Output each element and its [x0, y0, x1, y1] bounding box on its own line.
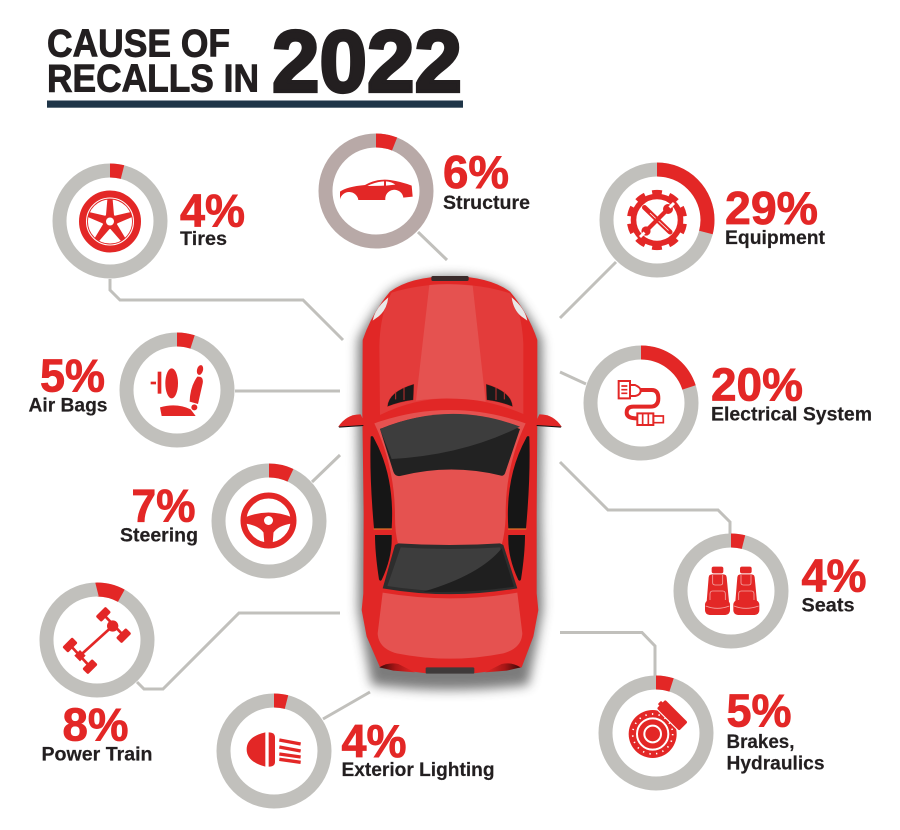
icon: seat with air bag — [151, 364, 204, 416]
rear bumper — [426, 667, 474, 674]
right hood vent — [486, 384, 513, 407]
rear window — [383, 543, 517, 594]
label — [726, 731, 825, 774]
left hood vent — [387, 384, 414, 407]
right mirror — [536, 414, 562, 428]
heading: year 2022: 2022 — [272, 14, 462, 110]
car shadow — [357, 276, 543, 690]
callout: exterior lighting — [224, 700, 494, 802]
value: 4% — [802, 550, 866, 602]
right side windows — [508, 436, 530, 581]
connector: air bags — [235, 390, 340, 392]
right tail light — [485, 663, 521, 672]
icon: headlight — [247, 732, 301, 767]
donut: 4% — [60, 170, 160, 272]
donut: 29% — [606, 170, 708, 270]
value: 7% — [132, 480, 196, 532]
connector: exterior lighting — [323, 692, 370, 719]
label: Structure — [443, 192, 530, 214]
donut: 6% — [326, 140, 426, 242]
label: Brakes, — [726, 731, 794, 753]
callout: steering — [120, 470, 320, 572]
icon: front seats — [705, 567, 759, 615]
callout: air bags — [28, 340, 228, 440]
title underline — [47, 100, 463, 108]
callout: seats — [680, 540, 866, 642]
connector: electrical system — [560, 372, 586, 384]
label: Hydraulics — [726, 752, 825, 774]
icon: car side view — [340, 180, 413, 200]
left mirror — [338, 414, 364, 428]
label: Power Train — [42, 744, 152, 766]
value: 29% — [725, 182, 818, 234]
label: Steering — [120, 524, 198, 546]
label: Seats — [802, 594, 855, 616]
callout: power train — [42, 590, 152, 766]
donut: 4% — [224, 700, 324, 802]
value: 4% — [342, 715, 406, 767]
icon: steering wheel — [244, 496, 294, 546]
roof — [374, 410, 526, 545]
heading: cause of recalls in: CAUSE OF — [47, 22, 230, 66]
donut: 7% — [218, 470, 320, 572]
donut: 5% — [126, 340, 228, 440]
value: 20% — [711, 358, 803, 410]
connector: tires — [110, 279, 343, 340]
car body — [362, 276, 538, 673]
icon: gear and tools — [625, 188, 689, 252]
donut: 8% — [46, 590, 148, 690]
connector: steering — [312, 455, 340, 482]
heading: cause of recalls in: RECALLS IN — [47, 58, 259, 100]
right headlight — [512, 297, 527, 321]
callout: structure — [326, 140, 530, 242]
left tail light — [379, 663, 415, 672]
connector: power train — [137, 613, 340, 689]
label: Equipment — [725, 227, 825, 249]
connector: seats — [560, 462, 730, 535]
connector: structure — [418, 232, 447, 260]
title — [47, 14, 463, 110]
vent dividers — [396, 388, 504, 400]
windshield — [380, 414, 520, 476]
icon: drivetrain — [62, 607, 131, 674]
label: Electrical System — [711, 404, 872, 426]
car illustration — [338, 276, 562, 690]
hood — [379, 284, 523, 415]
label: Air Bags — [28, 394, 108, 416]
callout: equipment — [606, 170, 825, 270]
callout: tires — [60, 170, 245, 272]
donut: 20% — [590, 352, 692, 454]
icon: wheel — [82, 194, 138, 249]
callout: electrical system — [590, 352, 872, 454]
label: Exterior Lighting — [342, 759, 494, 781]
trunk — [378, 593, 522, 659]
icon: brake disc — [629, 700, 688, 758]
value: 5% — [726, 684, 792, 736]
donut: 5% — [606, 682, 706, 784]
connector: equipment — [560, 262, 616, 318]
donut: 4% — [680, 540, 782, 642]
hood centre panel — [416, 284, 486, 402]
icon: electrical connector — [619, 381, 663, 426]
front grille — [431, 276, 469, 281]
label: Tires — [180, 228, 227, 250]
callout: brakes, hydraulics — [606, 682, 825, 784]
connector: brakes — [560, 632, 655, 676]
left headlight — [373, 297, 388, 321]
left side windows — [370, 436, 392, 581]
value: 5% — [40, 350, 105, 402]
value: 8% — [62, 698, 128, 750]
heading: cause of recalls in — [47, 22, 259, 100]
value: 4% — [180, 184, 245, 236]
value: 6% — [443, 146, 509, 198]
